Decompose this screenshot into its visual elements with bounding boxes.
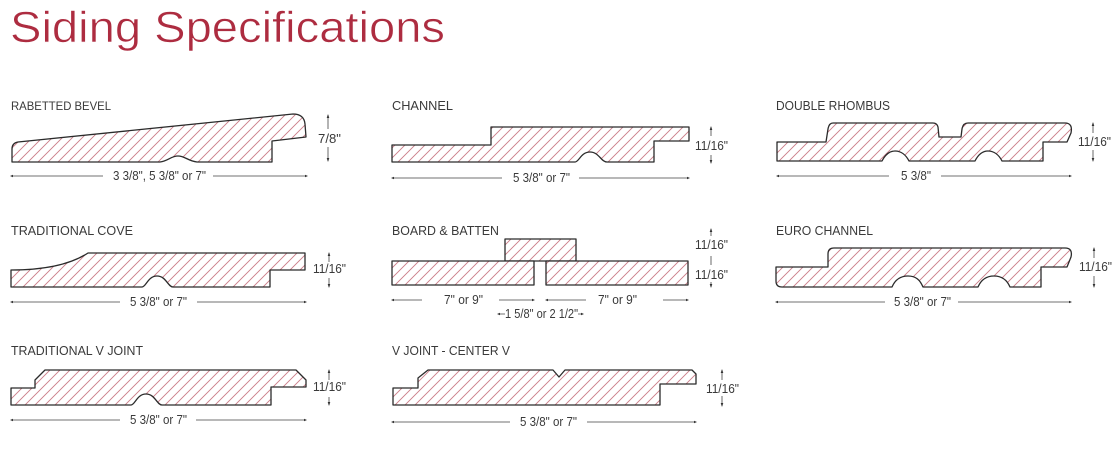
panel: board and batten	[391, 224, 728, 321]
panel: traditional cove	[10, 224, 346, 309]
height dimension: 11/16"	[706, 382, 739, 396]
heading: traditional v joint: TRADITIONAL V JOINT	[11, 344, 143, 358]
profile: traditional cove	[11, 253, 305, 287]
height dimension: batten	[695, 228, 728, 262]
profile: v joint center v	[393, 370, 696, 405]
profile: euro channel	[776, 248, 1071, 287]
height dimension	[706, 369, 739, 407]
profile: right board	[546, 261, 688, 285]
width dimension: 5 3/8" or 7"	[130, 295, 187, 309]
height dimension: board: 11/16"	[695, 268, 728, 282]
width dimension: 5 3/8" or 7"	[894, 295, 951, 309]
heading: euro channel: EURO CHANNEL	[776, 224, 873, 238]
panel: double rhombus	[776, 99, 1111, 183]
height dimension: 11/16"	[313, 262, 346, 276]
panel: traditional v joint	[10, 344, 346, 427]
height dimension	[313, 252, 346, 288]
profile: rabetted bevel	[12, 114, 306, 162]
heading: rabetted bevel: RABETTED BEVEL	[11, 99, 111, 113]
height dimension: 11/16"	[1079, 260, 1112, 274]
panel: v joint center v	[391, 344, 739, 429]
heading: channel: CHANNEL	[392, 99, 453, 113]
height dimension: 11/16"	[313, 380, 346, 394]
width dimension: 5 3/8" or 7"	[513, 171, 570, 185]
width dimension: left board: 7" or 9"	[444, 293, 483, 307]
panel: rabetted bevel	[10, 99, 341, 183]
heading: v joint center v: V JOINT - CENTER V	[392, 344, 511, 358]
heading: double rhombus: DOUBLE RHOMBUS	[776, 99, 890, 113]
width dimension: 3 3/8", 5 3/8" or 7"	[113, 169, 206, 183]
width dimension: 5 3/8" or 7"	[130, 413, 187, 427]
height dimension: board	[695, 262, 728, 288]
height dimension: 7/8"	[318, 132, 341, 146]
height dimension	[313, 369, 346, 406]
gap dimension: 1 5/8" or 2 1/2"	[505, 307, 578, 321]
height dimension: 11/16"	[1078, 135, 1111, 149]
width dimension: right board: 7" or 9"	[598, 293, 637, 307]
panel: euro channel	[775, 224, 1112, 309]
title: Siding Specifications	[10, 3, 445, 52]
width dimension: 5 3/8" or 7"	[520, 415, 577, 429]
height dimension: 11/16"	[695, 139, 728, 153]
profile: traditional v joint	[11, 370, 306, 405]
height dimension	[1079, 247, 1112, 288]
profile: batten	[505, 239, 576, 261]
profile: double rhombus	[777, 123, 1071, 161]
profile: left board	[392, 261, 534, 285]
profile: channel	[392, 127, 689, 162]
height dimension	[695, 126, 728, 164]
height dimension	[318, 114, 341, 162]
heading: traditional cove: TRADITIONAL COVE	[11, 224, 133, 238]
height dimension	[1078, 122, 1111, 162]
panel: channel	[391, 99, 728, 185]
width dimension: 5 3/8"	[901, 169, 931, 183]
height dimension: batten: 11/16"	[695, 238, 728, 252]
heading: board and batten: BOARD & BATTEN	[392, 224, 499, 238]
